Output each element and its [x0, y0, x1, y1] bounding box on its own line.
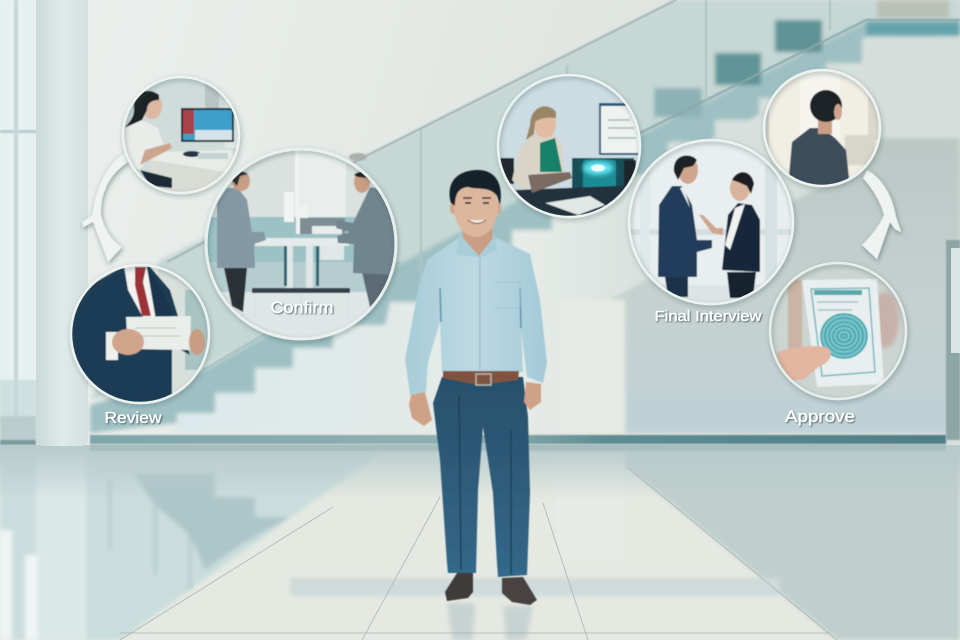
paper: [126, 316, 191, 350]
baseboard: [90, 435, 946, 444]
label: Review: Review: [104, 410, 162, 427]
person reflection: [447, 603, 475, 640]
man right: [362, 272, 390, 308]
pillar and window reflections: [36, 450, 86, 640]
woman: [123, 120, 165, 170]
table: [255, 238, 349, 246]
label: Confirm: Confirm: [270, 298, 334, 317]
desk: [148, 150, 238, 172]
collar: [456, 234, 497, 258]
window at left: [0, 0, 36, 445]
arrow: left curved arrow from top circle down to Review: [82, 152, 128, 262]
board: [599, 103, 639, 155]
arrow: right curved arrow from top circle down to Approve: [862, 170, 901, 259]
man: [788, 128, 850, 187]
head: [450, 202, 456, 214]
belt: [443, 371, 519, 385]
desk: [515, 186, 626, 216]
door edge at right: [946, 240, 960, 440]
photo circle: Confirm, two men at table: [205, 148, 397, 340]
shoes: [445, 573, 473, 601]
label: Approve: Approve: [785, 407, 855, 426]
hands: [112, 329, 144, 355]
tile lines: [120, 467, 837, 640]
railing lines: [167, 0, 960, 370]
bracket: [349, 153, 367, 161]
monitor: [181, 108, 234, 142]
shaded wall on right: [610, 138, 960, 433]
shirt: [405, 238, 547, 395]
photo circle: Review, man holding document: [70, 262, 210, 404]
central person: [405, 170, 547, 605]
window glow on wall: [560, 300, 625, 433]
photo circle: Approve, fingerprint document: [769, 262, 907, 400]
woman: [512, 132, 563, 190]
teal stairs under rail: [90, 22, 866, 433]
thumb: [777, 346, 831, 380]
glass balustrade: [90, 0, 960, 400]
neck: [463, 222, 493, 256]
suit: [70, 262, 190, 404]
label: Final Interview: Final Interview: [654, 308, 762, 325]
table items: [284, 192, 294, 222]
beige box and teal band top right: [877, 0, 949, 18]
woman: [727, 272, 756, 298]
teal device: [583, 160, 616, 192]
chairs/background dark: [500, 158, 514, 184]
white stepped block: [177, 38, 960, 433]
fingerprint: [821, 314, 867, 358]
card: [802, 279, 884, 387]
man left: [224, 268, 247, 312]
hands: [409, 392, 432, 426]
benches: [252, 288, 350, 293]
photo circle: woman at computer: [120, 75, 245, 200]
photo circle: man seen from behind: [763, 69, 881, 187]
floor: [0, 445, 960, 640]
stair reflection: [133, 473, 290, 570]
man: [665, 277, 688, 297]
trousers: [433, 377, 530, 577]
pillar: [36, 0, 88, 446]
photo circle: Final Interview, man and woman talking: [628, 139, 794, 305]
tie: [135, 267, 151, 316]
shadow band: [290, 578, 780, 596]
photo circle: woman at desk with glowing device: [497, 74, 641, 218]
cuff: [106, 332, 118, 360]
